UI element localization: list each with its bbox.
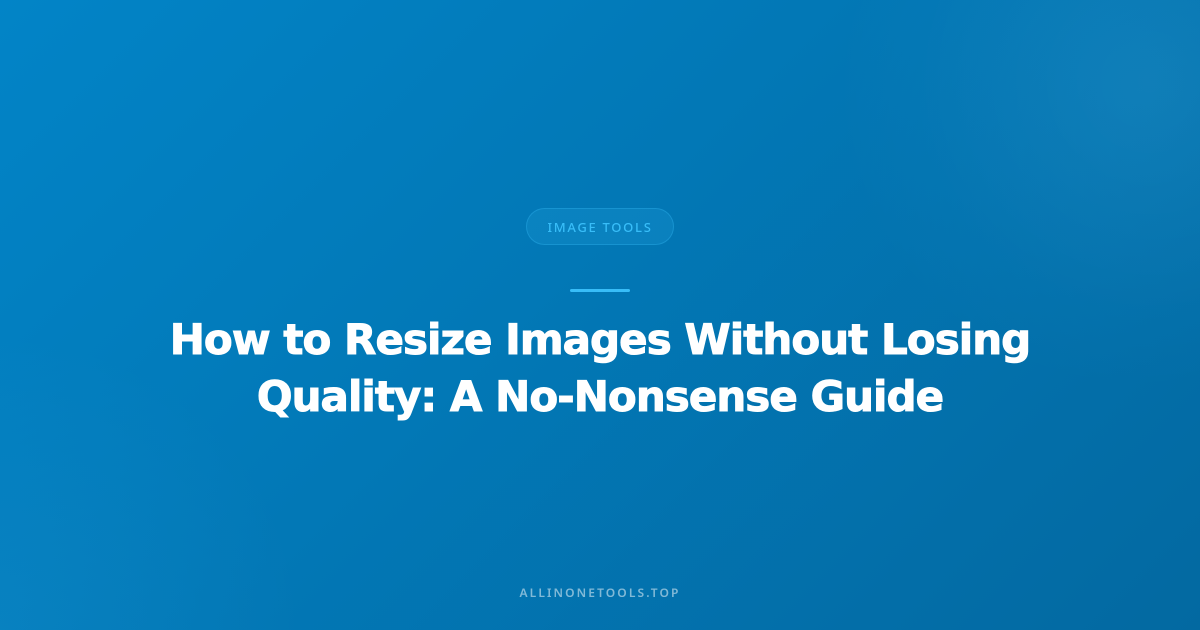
site name: ALLINONETOOLS.TOP xyxy=(520,584,680,601)
title: Quality: A No-Nonsense Guide xyxy=(257,372,943,421)
title xyxy=(170,315,1030,421)
category badge: IMAGE TOOLS xyxy=(547,218,653,236)
category badge xyxy=(526,208,674,245)
accent rule xyxy=(570,289,630,292)
title: How to Resize Images Without Losing xyxy=(170,315,1030,364)
